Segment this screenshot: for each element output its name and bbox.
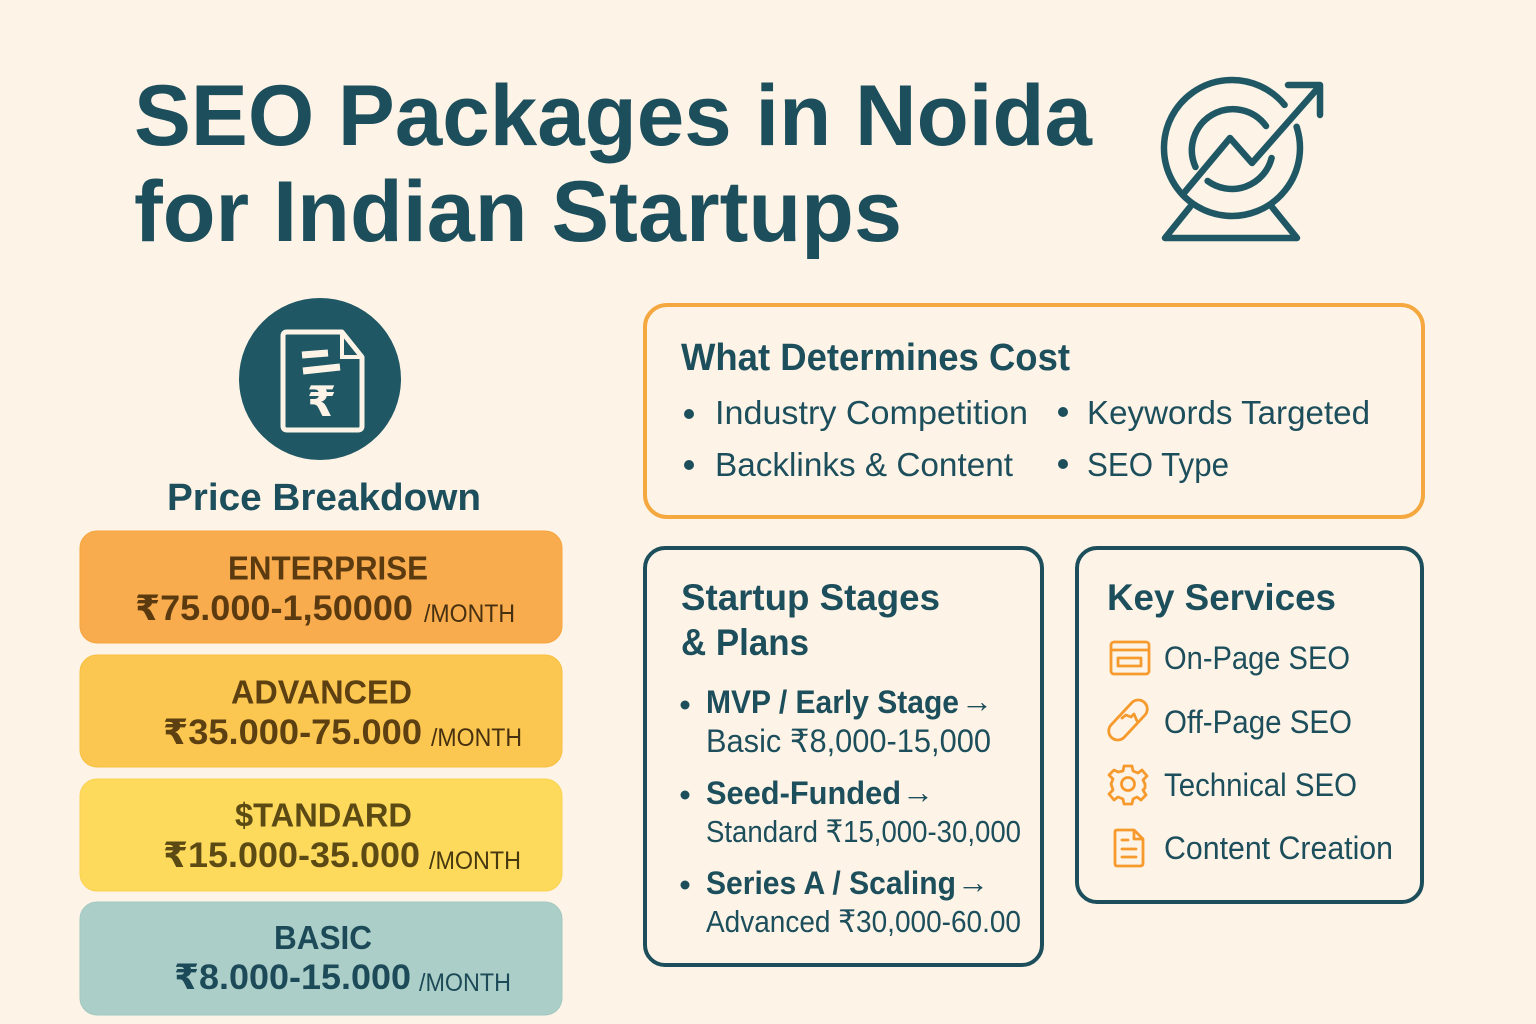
cost factors list: Keywords Targeted [1087, 394, 1370, 431]
tier: advanced: ₹35.000-75.000 [163, 713, 422, 752]
tier: standard [80, 779, 562, 891]
icon: rupee document [239, 298, 401, 460]
title [134, 68, 1093, 260]
stage: MVP [680, 683, 993, 759]
panel: key services [1077, 548, 1422, 902]
tier: basic [80, 902, 562, 1015]
cost factors list [684, 394, 1370, 483]
tier: enterprise [80, 531, 562, 643]
title: for Indian Startups [134, 164, 902, 260]
stage: seed-funded: Seed-Funded [706, 775, 901, 811]
tier: standard: ₹15.000-35.000 [163, 836, 420, 875]
service: content creation: Content Creation [1164, 830, 1393, 866]
tier: basic: ₹8.000-15.000 [174, 958, 411, 997]
stage: series A: Series A / Scaling [706, 865, 956, 901]
stage: MVP: MVP / Early Stage [706, 684, 959, 720]
panel: price breakdown [80, 298, 562, 1015]
tier: standard: $TANDARD [235, 796, 412, 834]
heading: key services: Key Services [1107, 577, 1336, 618]
title: SEO Packages in Noida [134, 68, 1093, 164]
service: on-page SEO: On-Page SEO [1164, 640, 1350, 676]
stage: series A [680, 864, 1021, 939]
tier: advanced: /MONTH [431, 724, 522, 752]
tier: enterprise: ₹75.000-1,50000 [135, 589, 413, 628]
tier: basic: /MONTH [419, 969, 511, 997]
service: off-page SEO [1105, 696, 1352, 744]
icon: rupee document: ₹ [307, 378, 336, 425]
tier: enterprise: ENTERPRISE [228, 550, 428, 586]
tier: basic: BASIC [274, 919, 372, 956]
stage: seed-funded: → [902, 774, 934, 810]
stage: MVP: → [961, 683, 993, 719]
cost factors list: SEO Type [1087, 446, 1229, 483]
tier: advanced: ADVANCED [231, 674, 412, 710]
tier: enterprise: /MONTH [424, 600, 515, 628]
heading: startup stages and plans: & Plans [681, 622, 809, 663]
heading: what determines cost: What Determines Cost [681, 337, 1070, 379]
heading: startup stages and plans: Startup Stages [681, 577, 940, 618]
tier: advanced [80, 655, 562, 767]
service: technical SEO: Technical SEO [1164, 767, 1357, 803]
service: technical SEO [1109, 766, 1357, 804]
heading: price breakdown: Price Breakdown [167, 477, 481, 519]
panel: what determines cost [645, 305, 1423, 517]
heading: startup stages and plans [681, 577, 940, 663]
stage: seed-funded: Standard ₹15,000-30,000 [706, 814, 1021, 849]
cost factors list: Industry Competition [715, 394, 1028, 431]
panel: startup stages and plans [645, 548, 1042, 965]
stage: series A: Advanced ₹30,000-60.00 [706, 904, 1021, 939]
stage: MVP: Basic ₹8,000-15,000 [706, 723, 991, 759]
icon: growth target with arrow [1164, 80, 1320, 238]
service: off-page SEO: Off-Page SEO [1164, 704, 1352, 740]
tier: standard: /MONTH [429, 847, 521, 875]
stage: seed-funded [680, 774, 1021, 849]
cost factors list: Backlinks & Content [715, 446, 1013, 483]
stage: series A: → [957, 864, 989, 900]
